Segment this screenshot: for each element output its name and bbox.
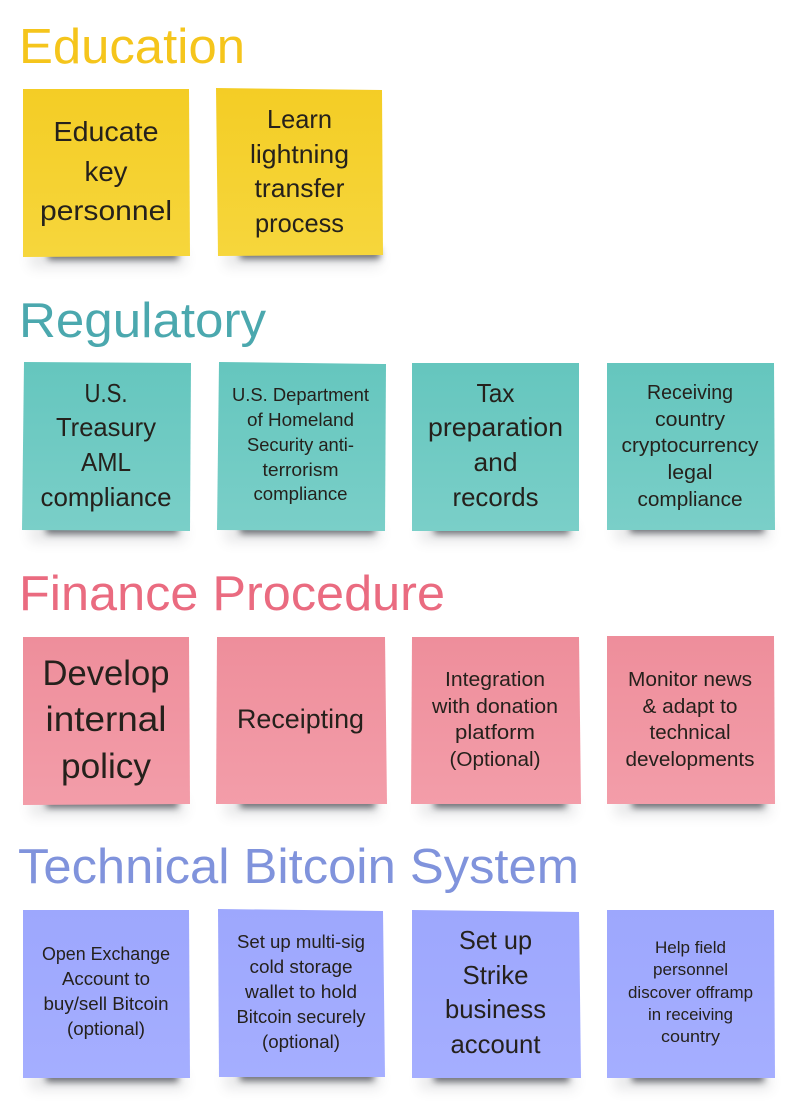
sticky note: Receiving country legal compliance [607,363,775,541]
heading: Regulatory: Regulatory [19,294,267,348]
sticky note: U.S. Treasury AML compliance: AML [81,447,131,477]
sticky note: Homeland Security compliance: of Homeland [247,410,354,430]
sticky note: Integration with donation platform: with donation [431,696,558,718]
sticky note: Monitor news and adapt: developments [626,749,754,771]
sticky note: Tax preparation and records: and [474,447,518,477]
sticky note: U.S. Treasury AML compliance: Treasury [56,412,156,442]
sticky note: Learn lightning transfer process: Learn [267,104,332,134]
sticky note: Integration with donation platform: platform [455,722,535,744]
heading: Education: Education [19,20,245,74]
sticky note: Help field personnel discover offramp: personnel [653,961,728,979]
sticky note: Monitor news and adapt: technical [650,722,730,744]
sticky note: Monitor news and adapt [607,636,775,816]
sticky note: Receiving country legal compliance: country [655,409,725,431]
sticky note: Set up multi-sig cold storage wallet: cold storage [250,957,352,977]
sticky note: Set up Strike business account: Set up [459,925,532,955]
sticky note: Open Exchange Account: buy/sell Bitcoin [44,994,168,1014]
sticky note: Set up multi-sig cold storage wallet: Set up multi-sig [237,932,365,952]
sticky note: Help field personnel discover offramp: Help field [655,939,726,957]
sticky note: Tax preparation and records: preparation [428,412,563,442]
sticky note: Monitor news and adapt: & adapt to [642,696,738,718]
sticky note: Homeland Security compliance: Security anti- [247,435,354,455]
sticky note: U.S. Treasury AML compliance [22,362,191,542]
sticky note: Receiving country legal compliance: Receiving [647,382,733,404]
sticky note: U.S. Treasury AML compliance: compliance [40,482,172,512]
sticky note: Educate key personnel: personnel [40,195,172,226]
sticky note: Set up Strike business account: Strike [462,960,528,990]
sticky note: Develop internal policy [23,637,190,816]
sticky note: Learn lightning transfer process: process [255,208,344,238]
sticky note: Tax preparation and records [412,363,579,542]
sticky note: U.S. Treasury AML compliance: U.S. [84,378,128,408]
sticky note: Receipting: Receipting [237,704,364,734]
sticky note: Open Exchange Account: (optional) [67,1019,145,1039]
sticky note: Help field personnel discover offramp: country [661,1028,721,1046]
sticky note: Help field personnel discover offramp: in receiving [648,1006,733,1024]
sticky note: Develop internal policy: policy [61,747,152,786]
sticky note: Open Exchange Account: Account to [62,969,150,989]
sticky note: Integration with donation platform: Integration [445,669,545,691]
sticky note: Set up Strike business account [412,910,581,1090]
sticky note: Open Exchange Account [23,910,190,1090]
sticky note: Receiving country legal compliance: legal [668,462,712,484]
sticky note: Tax preparation and records: records [452,482,538,512]
sticky note: Homeland Security compliance: terrorism [262,460,338,480]
sticky note: Receiving country legal compliance: compliance [638,489,742,511]
sticky note: Develop internal policy: internal [46,700,166,739]
sticky note: Set up multi-sig cold storage wallet [218,909,385,1089]
sticky note: Educate key personnel [23,89,190,268]
sticky note: Set up multi-sig cold storage wallet: wallet to hold [244,982,357,1002]
sticky note: Receipting [216,637,387,816]
sticky note: Open Exchange Account: Open Exchange [42,944,170,964]
sticky note: Develop internal policy: Develop [42,654,170,693]
sticky note: Homeland Security compliance: U.S. Department [232,385,369,405]
sticky note: Homeland Security compliance [217,362,386,542]
sticky note: Homeland Security compliance: compliance [254,484,348,504]
sticky note: Set up Strike business account: business [445,994,546,1024]
sticky note: Tax preparation and records: Tax [476,378,514,408]
sticky note: Set up multi-sig cold storage wallet: Bitcoin securely [236,1007,366,1027]
sticky note: Integration with donation platform [411,637,581,816]
sticky note: Help field personnel discover offramp: discover offramp [628,984,753,1002]
sticky note: Learn lightning transfer process: lightning [250,139,349,169]
heading: Finance Procedure: Finance Procedure [19,567,445,621]
sticky note: Monitor news and adapt: Monitor news [628,669,752,691]
sticky note: Set up multi-sig cold storage wallet: (optional) [262,1032,340,1052]
sticky note: Educate key personnel: Educate [54,116,158,147]
sticky note: Receiving country legal compliance: cryptocurrency [622,435,758,457]
sticky note: Learn lightning transfer process [216,88,383,267]
sticky note: Learn lightning transfer process: transfer [254,173,345,203]
sticky note: Educate key personnel: key [84,156,128,187]
sticky note: Help field personnel discover offramp [607,910,775,1090]
sticky note: Integration with donation platform: (Optional) [450,749,540,771]
sticky note: Set up Strike business account: account [450,1029,541,1059]
heading: Technical Bitcoin System: Technical Bitcoin System [18,840,579,894]
